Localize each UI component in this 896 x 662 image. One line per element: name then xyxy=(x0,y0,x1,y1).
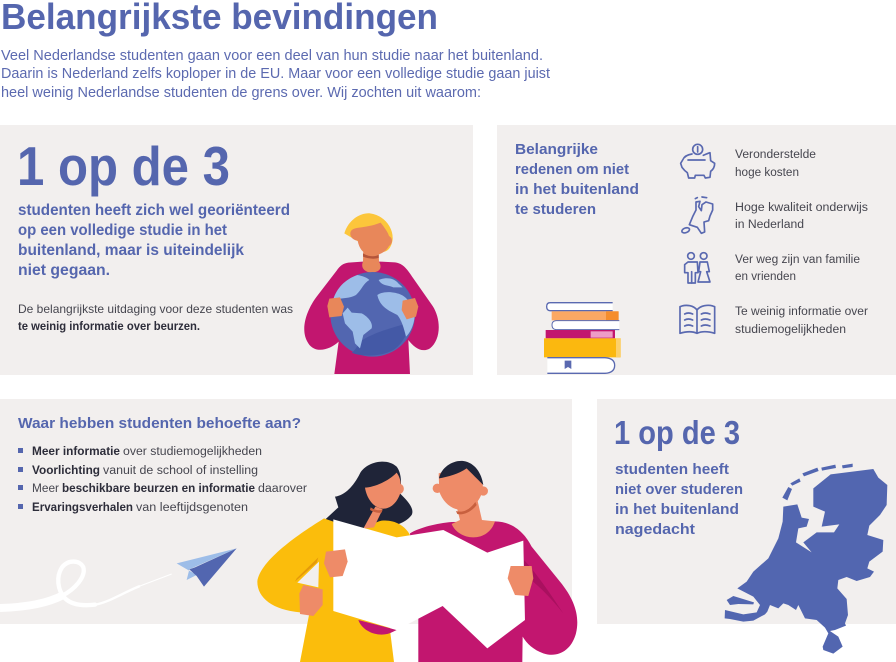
bullet list xyxy=(18,446,307,514)
reason: quality: in Nederland xyxy=(735,219,804,231)
bullet list: daarover xyxy=(258,483,307,495)
challenge note: te weinig informatie over beurzen. xyxy=(18,319,200,333)
bullet list: over studiemogelijkheden xyxy=(123,446,262,458)
panel heading: redenen om niet xyxy=(515,161,629,178)
statistic description: studenten heeft zich wel georiënteerd xyxy=(18,202,290,219)
reason: quality xyxy=(681,197,868,234)
statistic description: op een volledige studie in het xyxy=(18,222,227,239)
bullet list: vanuit de school of instelling xyxy=(103,465,258,477)
reason: costs: hoge kosten xyxy=(735,167,799,179)
reason: costs: Veronderstelde xyxy=(735,149,816,161)
statistic description xyxy=(18,202,290,279)
reason: quality: Hoge kwaliteit onderwijs xyxy=(735,202,868,214)
icon: open book xyxy=(680,305,715,333)
intro text: Daarin is Nederland zelfs koploper in de EU. Maar voor een volledige studie gaan juist xyxy=(1,66,550,82)
map xyxy=(333,519,525,648)
illustration: map of the Netherlands xyxy=(725,464,887,654)
reason: information: studiemogelijkheden xyxy=(735,324,846,336)
icon: piggy bank xyxy=(681,144,715,178)
illustration: stack of books xyxy=(544,303,621,373)
man xyxy=(410,521,577,662)
panel heading: Belangrijke xyxy=(515,141,598,158)
statistic description: niet gegaan. xyxy=(18,262,110,279)
illustration: two people reading a map xyxy=(257,461,577,662)
statistic description xyxy=(615,461,743,538)
reason: costs xyxy=(681,144,816,179)
panel: redenen xyxy=(497,125,896,375)
hands xyxy=(324,549,348,577)
panel heading xyxy=(515,141,639,218)
bullet list: beschikbare beurzen en informatie xyxy=(62,483,255,495)
big statistic: 1 op de 3 xyxy=(17,135,230,197)
bullet list: Voorlichting xyxy=(32,465,100,477)
challenge note xyxy=(18,302,293,333)
panel: 1 op de 3 georiënteerd xyxy=(0,125,473,375)
bullet list: Meer xyxy=(32,483,59,495)
panel: behoefte xyxy=(0,399,577,662)
statistic description: niet over studeren xyxy=(615,481,743,498)
reason: family xyxy=(685,253,860,283)
icon: two people xyxy=(685,253,710,283)
challenge note: De belangrijkste uitdaging voor deze studenten was xyxy=(18,302,293,316)
big statistic: 1 op de 3 xyxy=(614,414,740,451)
woman xyxy=(323,462,412,550)
panel: 1 op de 3 niet nagedacht xyxy=(597,399,896,654)
panel heading: Waar hebben studenten behoefte aan? xyxy=(18,415,301,432)
panel heading: te studeren xyxy=(515,201,596,218)
bullet list: van leeftijdsgenoten xyxy=(136,502,248,514)
intro text xyxy=(1,48,550,101)
statistic description: nagedacht xyxy=(615,521,695,538)
bullet list: Ervaringsverhalen xyxy=(32,502,133,514)
panel heading: in het buitenland xyxy=(515,181,639,198)
bullet list: Meer informatie xyxy=(32,446,120,458)
intro text: heel weinig Nederlandse studenten de grens over. Wij zochten uit waarom: xyxy=(1,85,481,101)
reason: information xyxy=(680,305,868,336)
illustration: paper plane with loop trail xyxy=(0,548,237,608)
statistic description: buitenland, maar is uiteindelijk xyxy=(18,242,244,259)
statistic description: in het buitenland xyxy=(615,501,739,518)
illustration: person holding globe xyxy=(304,213,439,374)
reason: family: Ver weg zijn van familie xyxy=(735,254,860,266)
intro text: Veel Nederlandse studenten gaan voor een deel van hun studie naar het buitenland. xyxy=(1,48,543,64)
icon: map of the Netherlands xyxy=(681,197,713,234)
reason: family: en vrienden xyxy=(735,271,796,283)
reason: information: Te weinig informatie over xyxy=(735,306,868,318)
statistic description: studenten heeft xyxy=(615,461,729,478)
